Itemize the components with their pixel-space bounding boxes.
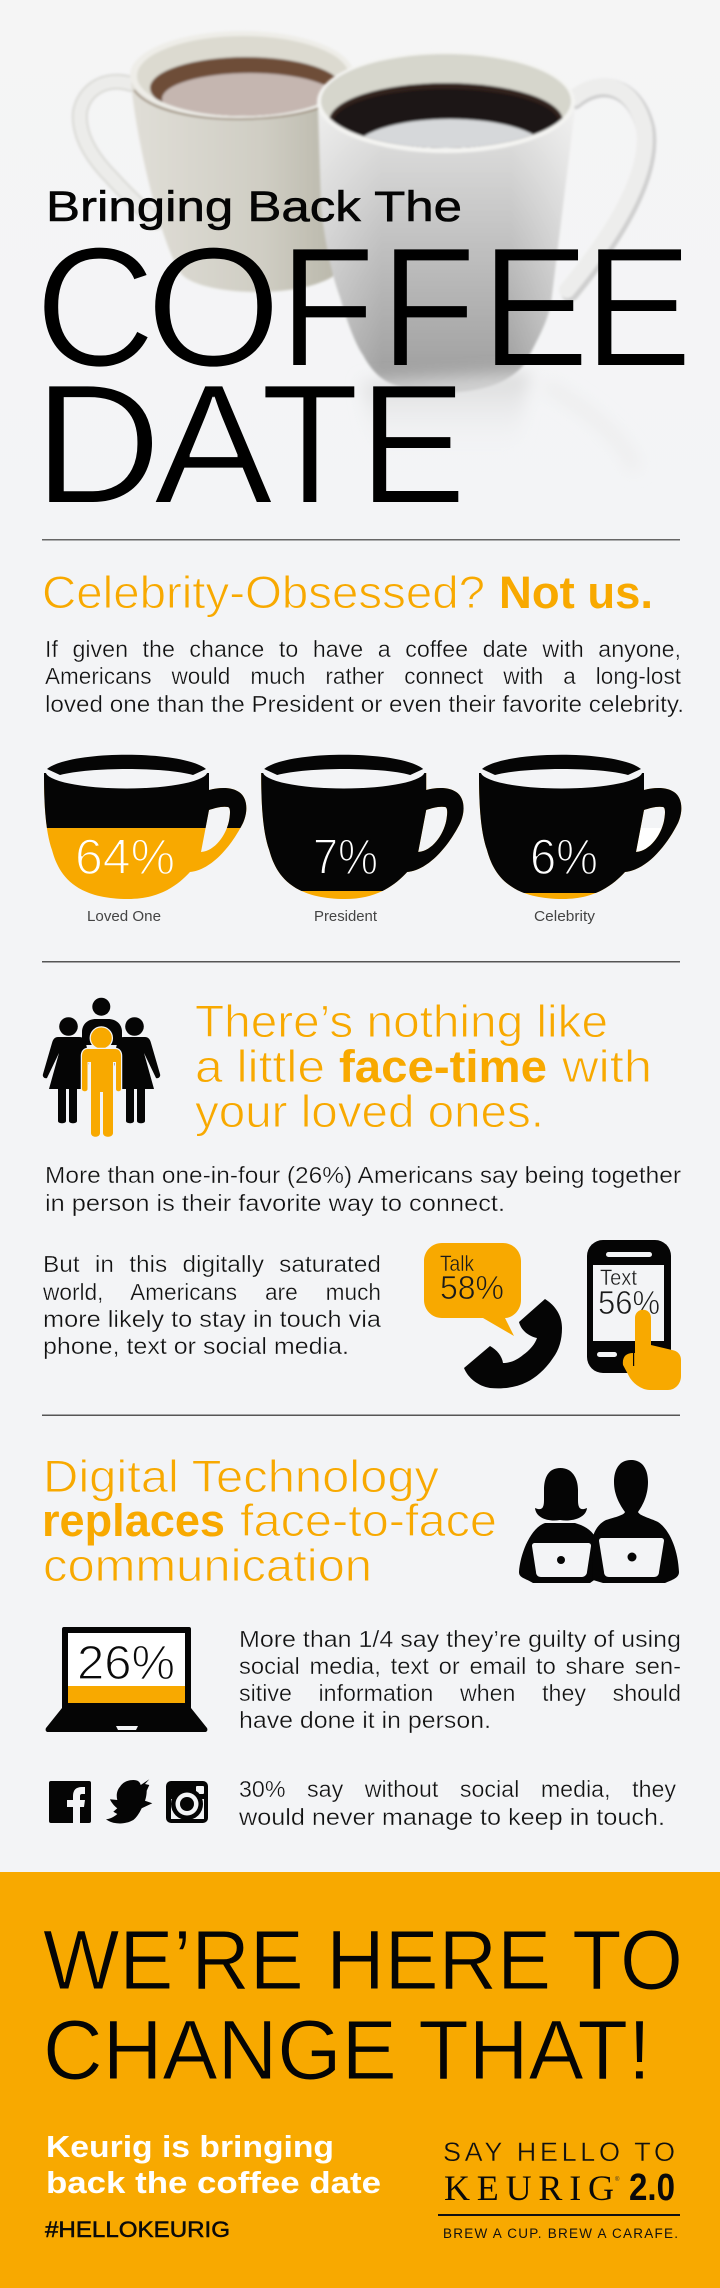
icon: instagram (166, 1781, 208, 1823)
heading: face-time: with (561, 1041, 652, 1092)
text block: one-in-four: in person is their favorite way to connect. (45, 1190, 505, 1216)
cup: Celebrity 6%: 6% (530, 829, 598, 885)
icon: talk bubble and handset (424, 1243, 562, 1388)
text block: digitally saturated: phone, text or social media. (43, 1333, 349, 1359)
icon: telephone handset (464, 1299, 562, 1388)
title: COFFEE: E (584, 212, 692, 403)
text block: one-in-four (45, 1162, 681, 1216)
logo: Keurig 2.0: ® (615, 2176, 620, 2183)
text block: digitally saturated: more likely to stay in touch via (43, 1306, 381, 1332)
heading: face-time (195, 996, 652, 1137)
text: Keurig is bringing back the coffee date: back the coffee date (46, 2165, 381, 2200)
text block: 30 percent: 30% say without social media, they (239, 1776, 676, 1802)
icon: group of people (43, 998, 160, 1137)
logo: Keurig 2.0: 2.0 (629, 2167, 675, 2209)
cup: Loved One 64%: Loved One (87, 908, 161, 925)
cup: Celebrity 6%: Celebrity (534, 908, 596, 925)
man silhouette (592, 1460, 679, 1583)
title: Bringing Back The: Bringing Back The (46, 183, 462, 231)
title (34, 183, 692, 540)
cup: President 7%: 7% (313, 829, 378, 885)
title: COFFEE: O (146, 211, 281, 403)
divider (42, 1414, 680, 1416)
icon: twitter bird (106, 1779, 152, 1824)
text block: coffee date intro: loved one than the President or even their favorite celebrity. (45, 691, 684, 717)
text block: digitally saturated: But in this digitally saturated (43, 1251, 381, 1277)
panel: call to action (0, 1872, 720, 2288)
heading: we're here to change that: CHANGE THAT! (43, 2003, 651, 2097)
text block: coffee date intro: If given the chance to have a coffee date with anyone, (45, 636, 681, 662)
heading: face-time: a little (195, 1041, 325, 1092)
heading: Celebrity-Obsessed: Not us. (499, 567, 653, 618)
speech bubble: talk 58%: Talk (440, 1251, 475, 1276)
heading: digital technology: Digital Technology (43, 1451, 440, 1502)
title: DATE: E (359, 349, 466, 540)
text block: more than 1/4 (239, 1626, 681, 1733)
title: COFFEE: E (481, 212, 589, 403)
logo: Keurig 2.0: BREW A CUP. BREW A CARAFE. (443, 2226, 678, 2241)
text block: digitally saturated (42, 1251, 381, 1359)
title: DATE: D (34, 348, 162, 539)
cup: Loved One 64% (44, 754, 246, 925)
heading: digital technology: replaces (42, 1495, 225, 1546)
icon: facebook (49, 1781, 91, 1823)
text: Keurig is bringing back the coffee date: Keurig is bringing (46, 2129, 334, 2164)
mug reflection (362, 372, 635, 470)
text block: more than 1/4: social media, text or email to share sen- (239, 1653, 681, 1679)
icon: pointing hand (623, 1310, 681, 1390)
icon: smartphone with hand: 56% (598, 1284, 660, 1321)
text block: one-in-four: More than one-in-four (26%) Americans say being together (45, 1162, 681, 1188)
heading: digital technology: communication (43, 1540, 372, 1591)
title: DATE: T (261, 349, 359, 540)
text block: coffee date intro (45, 636, 684, 717)
title: COFFEE (35, 211, 692, 403)
heading: we're here to change that: WE’RE HERE TO (43, 1913, 683, 2007)
title: COFFEE: F (380, 212, 476, 403)
hero photo: two coffee mugs (71, 31, 658, 416)
text block: digitally saturated: world, Americans are much (42, 1279, 381, 1305)
title: COFFEE: F (279, 212, 375, 403)
cup: President 7%: President (314, 908, 378, 925)
text: Keurig is bringing back the coffee date (46, 2129, 381, 2200)
heading: Celebrity-Obsessed: Celebrity-Obsessed? (42, 567, 485, 618)
divider (42, 961, 680, 962)
cup: Celebrity 6% (479, 754, 681, 925)
title: DATE: A (154, 349, 273, 540)
heading: face-time: There’s nothing like (195, 996, 608, 1047)
icon: laptop 26% (46, 1627, 207, 1732)
text block: 30 percent: would never manage to keep in touch. (238, 1804, 665, 1830)
speech bubble: talk 58% (424, 1243, 521, 1336)
text block: coffee date intro: Americans would much rather connect with a long-lost (45, 663, 682, 689)
woman silhouette (519, 1468, 597, 1583)
chart: coffee cups (44, 754, 681, 925)
title: COFFEE: C (35, 211, 156, 402)
icon: laptop 26%: 26% (77, 1637, 175, 1690)
heading: face-time: your loved ones. (195, 1086, 544, 1137)
speech bubble: talk 58%: 58% (440, 1269, 504, 1306)
heading: digital technology (42, 1451, 497, 1591)
text block: more than 1/4: have done it in person. (239, 1707, 491, 1733)
icon: two people on laptops (519, 1460, 679, 1583)
left mug (80, 31, 354, 292)
logo: Keurig 2.0: KEURIG (444, 2168, 614, 2208)
icon: smartphone with hand (587, 1240, 681, 1390)
text block: more than 1/4: More than 1/4 say they’re guilty of using (239, 1626, 681, 1652)
hashtag: #HELLOKEURIG (45, 2217, 230, 2242)
logo: Keurig 2.0 (438, 2137, 680, 2241)
heading: Celebrity-Obsessed (42, 567, 653, 618)
heading: face-time: face-time (339, 1041, 547, 1092)
icon: smartphone with hand: Text (600, 1265, 637, 1290)
cup: President 7% (261, 754, 464, 925)
text block: 30 percent (238, 1776, 676, 1830)
icons: social media (49, 1779, 208, 1824)
heading: we're here to change that (43, 1913, 683, 2097)
cup: Loved One 64%: 64% (75, 829, 175, 885)
heading: digital technology: face-to-face (240, 1495, 497, 1546)
right mug (317, 51, 647, 393)
laptops (532, 1538, 664, 1577)
logo: Keurig 2.0: SAY HELLO TO (443, 2137, 675, 2167)
text block: more than 1/4: sitive information when they should (239, 1680, 681, 1706)
divider (42, 539, 680, 540)
title: DATE (34, 348, 466, 540)
